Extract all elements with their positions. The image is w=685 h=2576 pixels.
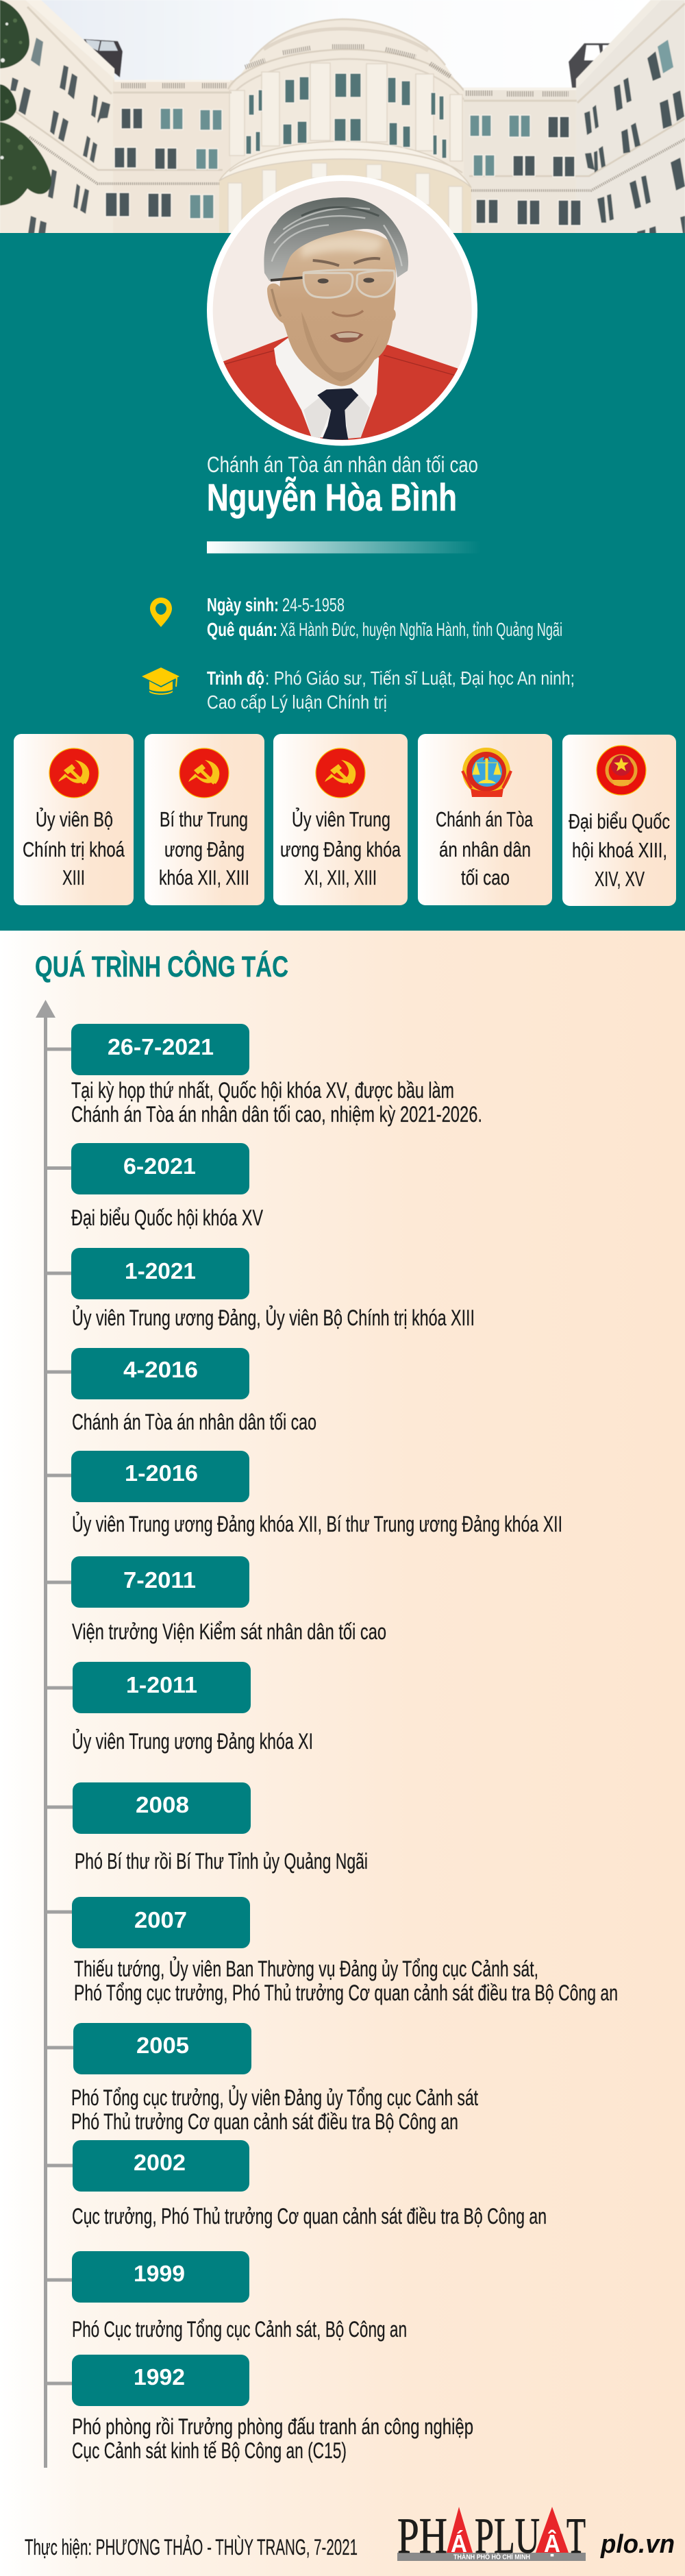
- building walls: [0, 0, 685, 234]
- timeline item: 2005: Phó Thủ trưởng Cơ quan cảnh sát điều tra Bộ Công an: [71, 2109, 458, 2134]
- eyebrows, eyes, nose, mouth: [313, 258, 380, 266]
- timeline item: 6-2021: 6-2021: [123, 1153, 196, 1179]
- timeline item: 1992: 1992: [134, 2364, 185, 2390]
- rooftop box left: [84, 39, 123, 77]
- icon: graduation cap: [142, 667, 179, 695]
- credit line: Thực hiện: PHƯƠNG THẢO - THÙY TRANG, 7-2021: [25, 2535, 358, 2560]
- logo: plo.vn: plo.vn: [600, 2530, 675, 2559]
- education text: Cao cấp Lý luận Chính trị: [207, 691, 387, 713]
- timeline item: 1-2011: Ủy viên Trung ương Đảng khóa XI: [72, 1729, 313, 1754]
- name: Nguyễn Hòa Bình: [207, 476, 457, 519]
- timeline item: 2005: [47, 2023, 478, 2134]
- arrow: timeline axis: [36, 1000, 55, 2468]
- timeline item: 1-2016: [47, 1451, 562, 1536]
- robe: [221, 336, 458, 449]
- timeline item: 1-2011: 1-2011: [126, 1672, 197, 1697]
- timeline item: 6-2021: [47, 1143, 263, 1230]
- education text: Trình độ: [207, 667, 264, 689]
- tie: [317, 389, 358, 440]
- header photo: court building: [0, 0, 685, 234]
- timeline item: 26-7-2021: [47, 1024, 482, 1127]
- icon: national emblem: [597, 746, 646, 795]
- icon: location pin: [150, 598, 172, 627]
- gradient divider bar: [207, 541, 481, 554]
- logo: Pháp Luật: THÀNH PHỐ HỒ CHÍ MINH: [453, 2552, 530, 2562]
- panel: card Central Committee: XI, XII, XIII: [304, 866, 377, 890]
- timeline item: 7-2011: Viện trưởng Viện Kiểm sát nhân dân tối cao: [72, 1619, 386, 1644]
- panel: card Central Committee: [273, 734, 408, 905]
- windows: left wing: [10, 38, 110, 234]
- timeline item: 1-2021: 1-2021: [125, 1258, 196, 1284]
- timeline item: 26-7-2021: Tại kỳ họp thứ nhất, Quốc hội khóa XV, được bầu làm: [71, 1078, 454, 1103]
- windows: rotunda: [246, 73, 447, 158]
- job title: Chánh án Tòa án nhân dân tối cao: [207, 452, 478, 477]
- panel: card National Assembly: [562, 735, 676, 906]
- rooftop box right: [569, 43, 616, 89]
- education text: : Phó Giáo sư, Tiến sĩ Luật, Đại học An ninh;: [265, 667, 575, 689]
- panel: card Party Secretary: khóa XII, XIII: [159, 866, 249, 890]
- panel: card Chief Justice: [418, 734, 552, 905]
- timeline item: 2002: [47, 2140, 547, 2229]
- timeline item: 4-2016: [47, 1348, 316, 1434]
- panel: card Chief Justice: án nhân dân: [439, 837, 531, 861]
- timeline item: 4-2016: 4-2016: [123, 1357, 198, 1382]
- logo: Pháp Luật: T: [566, 2508, 586, 2564]
- birth and hometown text: Ngày sinh:: [207, 594, 279, 615]
- logo: Pháp Luật: PLU: [475, 2508, 540, 2564]
- shirt: [274, 338, 379, 437]
- timeline item: 2005: Phó Tổng cục trưởng, Ủy viên Đảng ủy Tổng cục Cảnh sát: [71, 2085, 478, 2110]
- panel: card Central Committee: ương Đảng khóa: [280, 837, 401, 861]
- panel: card Politburo: [14, 734, 134, 905]
- panel: card Politburo: Ủy viên Bộ: [36, 807, 113, 831]
- logo: Pháp Luật: Á: [451, 2529, 467, 2557]
- panel: card Central Committee: Ủy viên Trung: [292, 807, 390, 831]
- windows: centre left: [105, 108, 222, 219]
- panel: card Politburo: XIII: [62, 866, 85, 890]
- timeline item: 6-2021: Đại biểu Quốc hội khóa XV: [71, 1205, 263, 1230]
- teal profile band: [0, 233, 685, 931]
- icon: court emblem: [462, 748, 511, 797]
- timeline item: 1-2021: [47, 1248, 475, 1330]
- heading: career timeline: QUÁ TRÌNH CÔNG TÁC: [35, 950, 288, 983]
- pilasters: [229, 63, 462, 161]
- logo: Pháp Luật: Ậ: [544, 2529, 560, 2557]
- panel: card Chief Justice: tối cao: [461, 866, 510, 890]
- birth and hometown text: 24-5-1958: [282, 594, 345, 615]
- windows: right wing: [584, 40, 685, 234]
- timeline item: 26-7-2021: Chánh án Tòa án nhân dân tối cao, nhiệm kỳ 2021-2026.: [71, 1102, 482, 1127]
- timeline item: 2008: [47, 1782, 368, 1874]
- cornices and balustrades: [16, 3, 685, 191]
- balcony band: [219, 142, 471, 234]
- panel: card National Assembly: XIV, XV: [595, 867, 645, 891]
- portrait: [206, 175, 480, 449]
- timeline item: 26-7-2021: 26-7-2021: [108, 1034, 214, 1059]
- timeline item: 1992: Phó phòng rồi Trưởng phòng đấu tranh án công nghiệp: [72, 2414, 473, 2439]
- timeline item: 2007: 2007: [134, 1907, 187, 1933]
- timeline item: 2005: 2005: [136, 2033, 189, 2058]
- panel: card Party Secretary: ương Đảng: [164, 837, 245, 861]
- windows: centre right: [470, 115, 581, 225]
- timeline item: 2007: [47, 1897, 618, 2005]
- timeline item: 2008: 2008: [136, 1792, 189, 1817]
- timeline item: 1999: [47, 2251, 407, 2342]
- face: [267, 230, 396, 386]
- glasses: [271, 278, 303, 280]
- birth and hometown text: Quê quán:: [207, 619, 277, 640]
- panel: card Party Secretary: Bí thư Trung: [160, 807, 248, 831]
- hair: [264, 197, 408, 281]
- panel: card Chief Justice: Chánh án Tòa: [436, 807, 534, 831]
- timeline item: 2002: 2002: [134, 2150, 186, 2175]
- timeline item: 1999: Phó Cục trưởng Tổng cục Cảnh sát, Bộ Công an: [72, 2317, 407, 2342]
- timeline item: 2008: Phó Bí thư rồi Bí Thư Tỉnh ủy Quảng Ngãi: [75, 1849, 368, 1874]
- timeline item: 1992: [47, 2355, 473, 2463]
- timeline item: 4-2016: Chánh án Tòa án nhân dân tối cao: [72, 1410, 316, 1434]
- birth and hometown text: [207, 594, 562, 640]
- logo: Pháp Luật: PH: [397, 2508, 447, 2564]
- timeline item: 7-2011: 7-2011: [123, 1567, 196, 1593]
- timeline item: 1992: Cục Cảnh sát kinh tế Bộ Công an (C15): [72, 2438, 347, 2463]
- timeline item: 1999: 1999: [134, 2261, 185, 2286]
- timeline item: 1-2021: Ủy viên Trung ương Đảng, Ủy viên Bộ Chính trị khóa XIII: [72, 1305, 475, 1330]
- tree: [0, 0, 51, 206]
- timeline item: 1-2011: [47, 1662, 313, 1754]
- timeline item: 7-2011: [47, 1556, 386, 1644]
- panel: career timeline background: [0, 931, 685, 2576]
- panel: card Party Secretary: [145, 734, 264, 905]
- timeline item: 1-2016: 1-2016: [125, 1460, 198, 1486]
- logo: Pháp Luật: [397, 2507, 586, 2564]
- education text: [207, 667, 575, 713]
- columns: [228, 163, 462, 234]
- panel: card Politburo: Chính trị khoá: [23, 837, 125, 861]
- dome and rotunda: [219, 19, 471, 234]
